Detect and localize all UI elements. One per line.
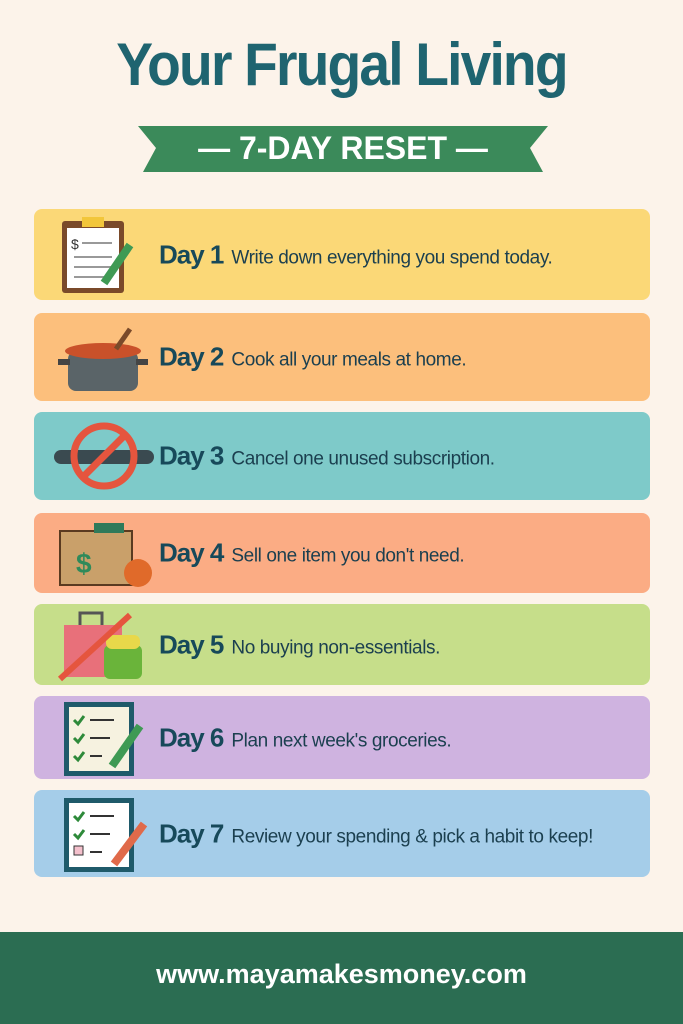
icon: clipboard xyxy=(62,217,134,293)
banner: 7-day reset: — 7-DAY RESET — xyxy=(198,130,488,166)
footer: website xyxy=(0,932,683,1024)
panel: day 1: Day 1 Write down everything you spend today. xyxy=(159,239,552,269)
panel: day 3: Day 3 Cancel one unused subscription. xyxy=(159,440,495,470)
panel: day 7: Day 7 Review your spending & pick a habit to keep! xyxy=(159,818,593,848)
panel: day 6 xyxy=(34,696,650,779)
panel: day 4 xyxy=(34,513,650,593)
icon: cancel sign xyxy=(54,422,154,490)
footer: website: www.mayamakesmoney.com xyxy=(156,959,527,989)
panel: day 2: Day 2 Cook all your meals at home. xyxy=(159,342,466,372)
panel: day 3 xyxy=(34,412,650,500)
title: Your Frugal Living xyxy=(116,31,567,98)
icon: checklist with pencil xyxy=(64,798,148,872)
panel: day 5 xyxy=(34,604,650,685)
panel: day 1 xyxy=(34,209,650,300)
icon: box and coin jar xyxy=(59,523,152,587)
panel: day 4: Day 4 Sell one item you don't need. xyxy=(159,538,464,568)
icon: pot xyxy=(58,328,148,391)
panel: day 6: Day 6 Plan next week's groceries. xyxy=(159,722,451,752)
icon: box and coin jar: $ xyxy=(76,548,92,579)
icon: crossed shopping bag xyxy=(58,612,142,682)
panel: day 5: Day 5 No buying non-essentials. xyxy=(159,629,440,659)
banner: 7-day reset xyxy=(138,126,548,172)
icon: clipboard: $ xyxy=(71,236,79,252)
icon: checklist xyxy=(64,702,144,776)
panel: day 7 xyxy=(34,790,650,877)
panel: day 2 xyxy=(34,313,650,401)
